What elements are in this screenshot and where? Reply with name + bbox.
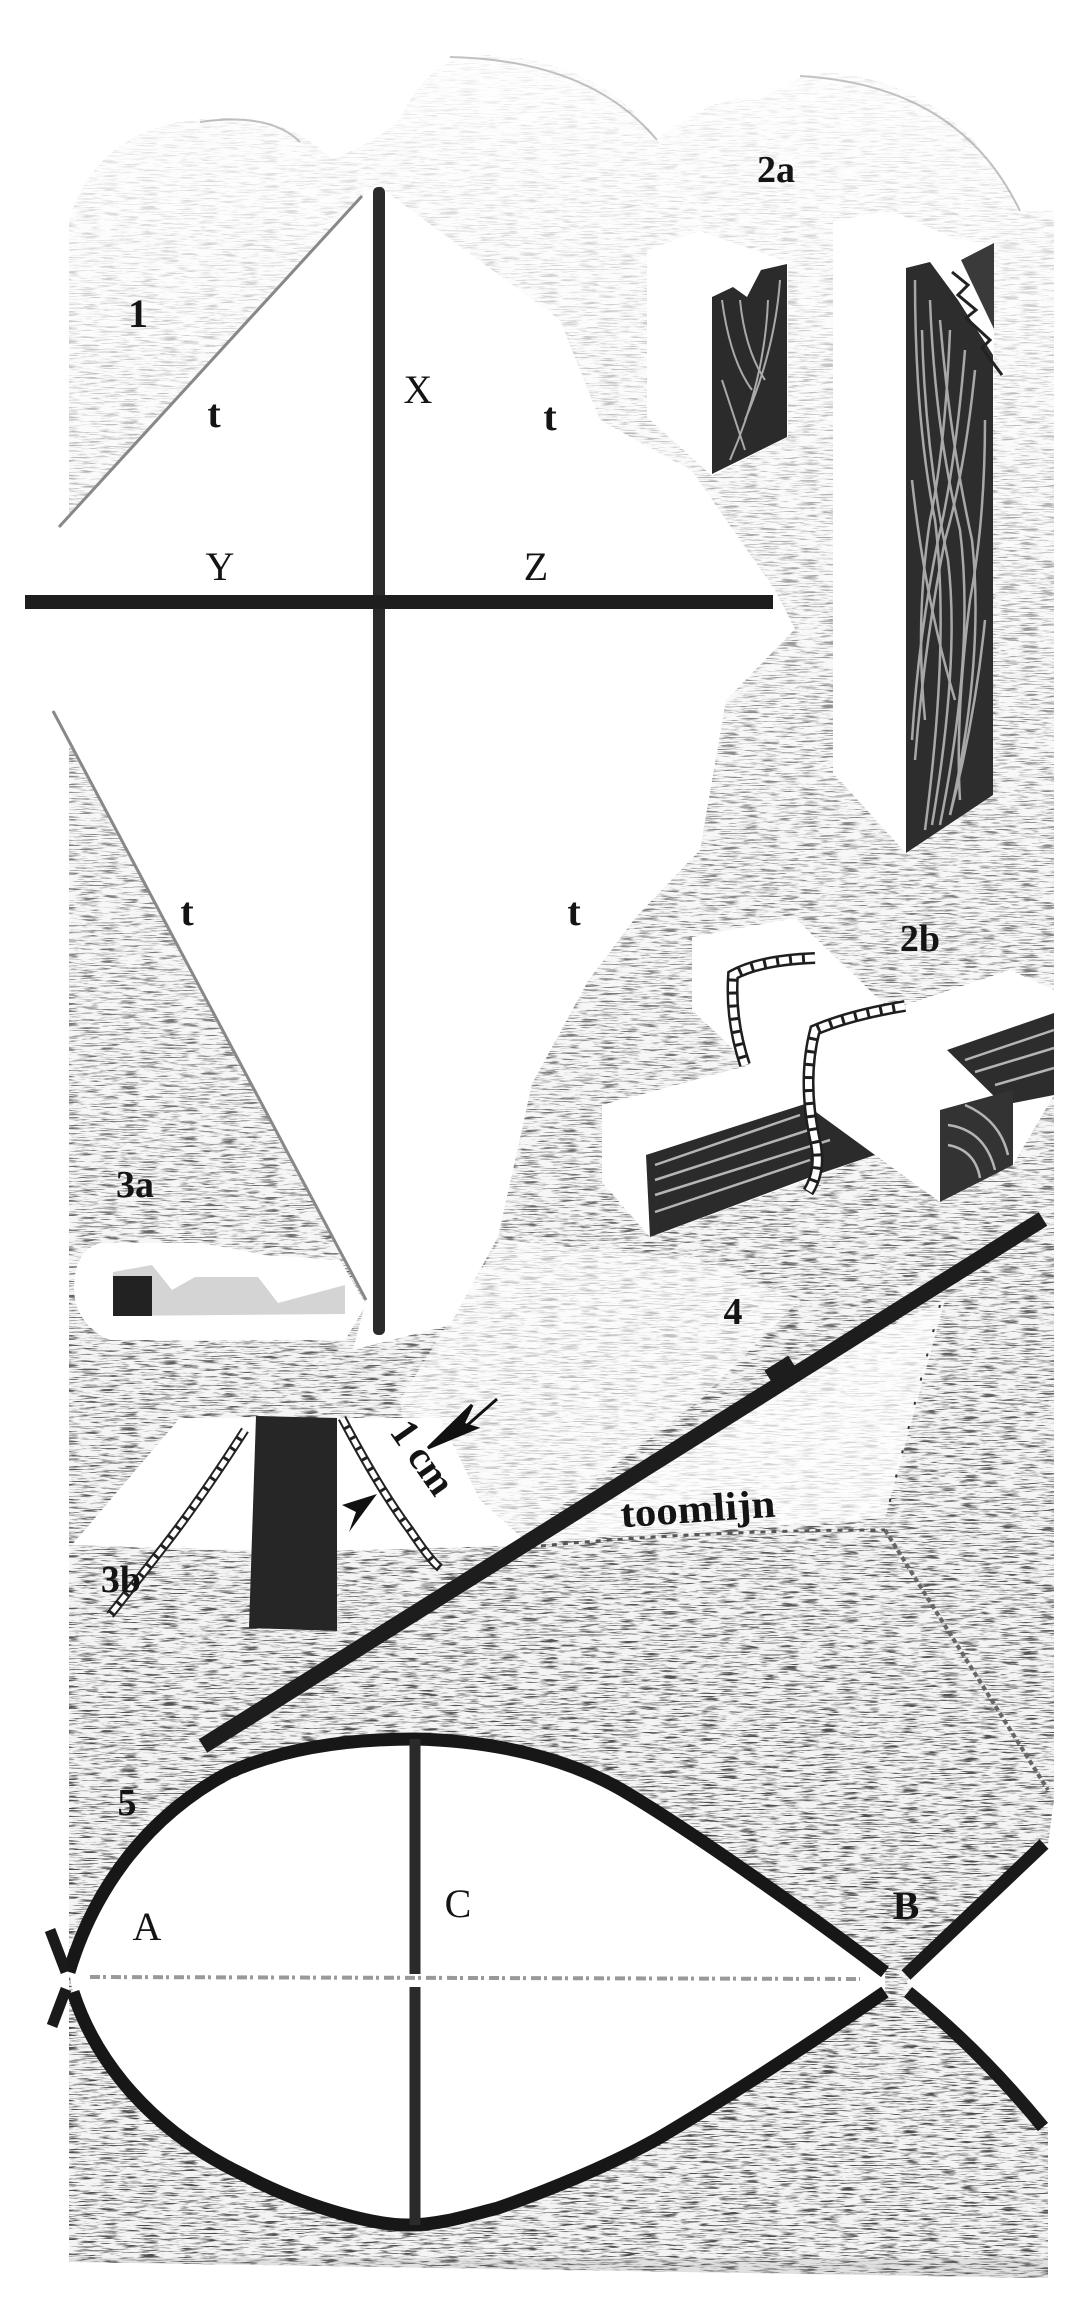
head ticks	[50, 1930, 66, 2026]
label C: C	[445, 1881, 471, 1926]
tail upper	[906, 1844, 1044, 1975]
panel 4: white sheet and bridle line	[203, 1219, 1048, 1790]
fish body fill	[69, 1739, 885, 2225]
lower curve	[73, 1992, 885, 2225]
label 3a: 3a	[116, 1164, 154, 1206]
panel 2b: crossed blocks with rope	[602, 918, 1054, 1237]
vertical C	[410, 1739, 420, 2225]
upper curve	[69, 1739, 885, 1972]
panel 1: white kite template	[0, 185, 795, 1350]
arrow upper	[428, 1399, 497, 1448]
panel 2a: short notched block	[647, 231, 788, 476]
label t upper left: t	[207, 391, 221, 436]
label toomlijn: toomlijn	[619, 1481, 777, 1536]
crossbar YZ	[25, 595, 773, 609]
thick line	[203, 1219, 1043, 1746]
tail lower	[908, 1992, 1043, 2127]
panel 3b: block with rope and 1 cm measure	[72, 1399, 530, 1631]
rope left	[110, 1430, 245, 1615]
label t upper right: t	[543, 394, 557, 439]
label B: B	[893, 1883, 919, 1928]
panel 3a: hook cross-section	[74, 1243, 366, 1340]
label 3b: 3b	[101, 1559, 141, 1601]
label 2b: 2b	[900, 918, 940, 960]
label 4: 4	[724, 1291, 742, 1333]
tab on line	[764, 1356, 796, 1382]
spine X	[373, 187, 385, 1335]
label 2a: 2a	[757, 149, 795, 191]
rope right	[342, 1418, 440, 1568]
arc outlines at top of panel	[200, 57, 1020, 211]
arrow lower	[342, 1494, 377, 1532]
dotted axis AB	[90, 1977, 860, 1979]
tail fill	[906, 1844, 1050, 2127]
label A: A	[133, 1904, 162, 1949]
label 5: 5	[118, 1782, 136, 1824]
label 1 cm: 1 cm	[381, 1411, 465, 1503]
label t lower left: t	[180, 889, 194, 934]
label Y: Y	[206, 544, 234, 589]
rope left	[732, 958, 815, 1065]
label Z: Z	[524, 544, 548, 589]
label 1: 1	[128, 291, 148, 336]
rope right	[808, 1006, 905, 1192]
label t lower right: t	[567, 889, 581, 934]
panel 5: fish template	[50, 1739, 1050, 2225]
panel 2a: long notched block	[833, 211, 1002, 853]
label X: X	[404, 367, 433, 412]
